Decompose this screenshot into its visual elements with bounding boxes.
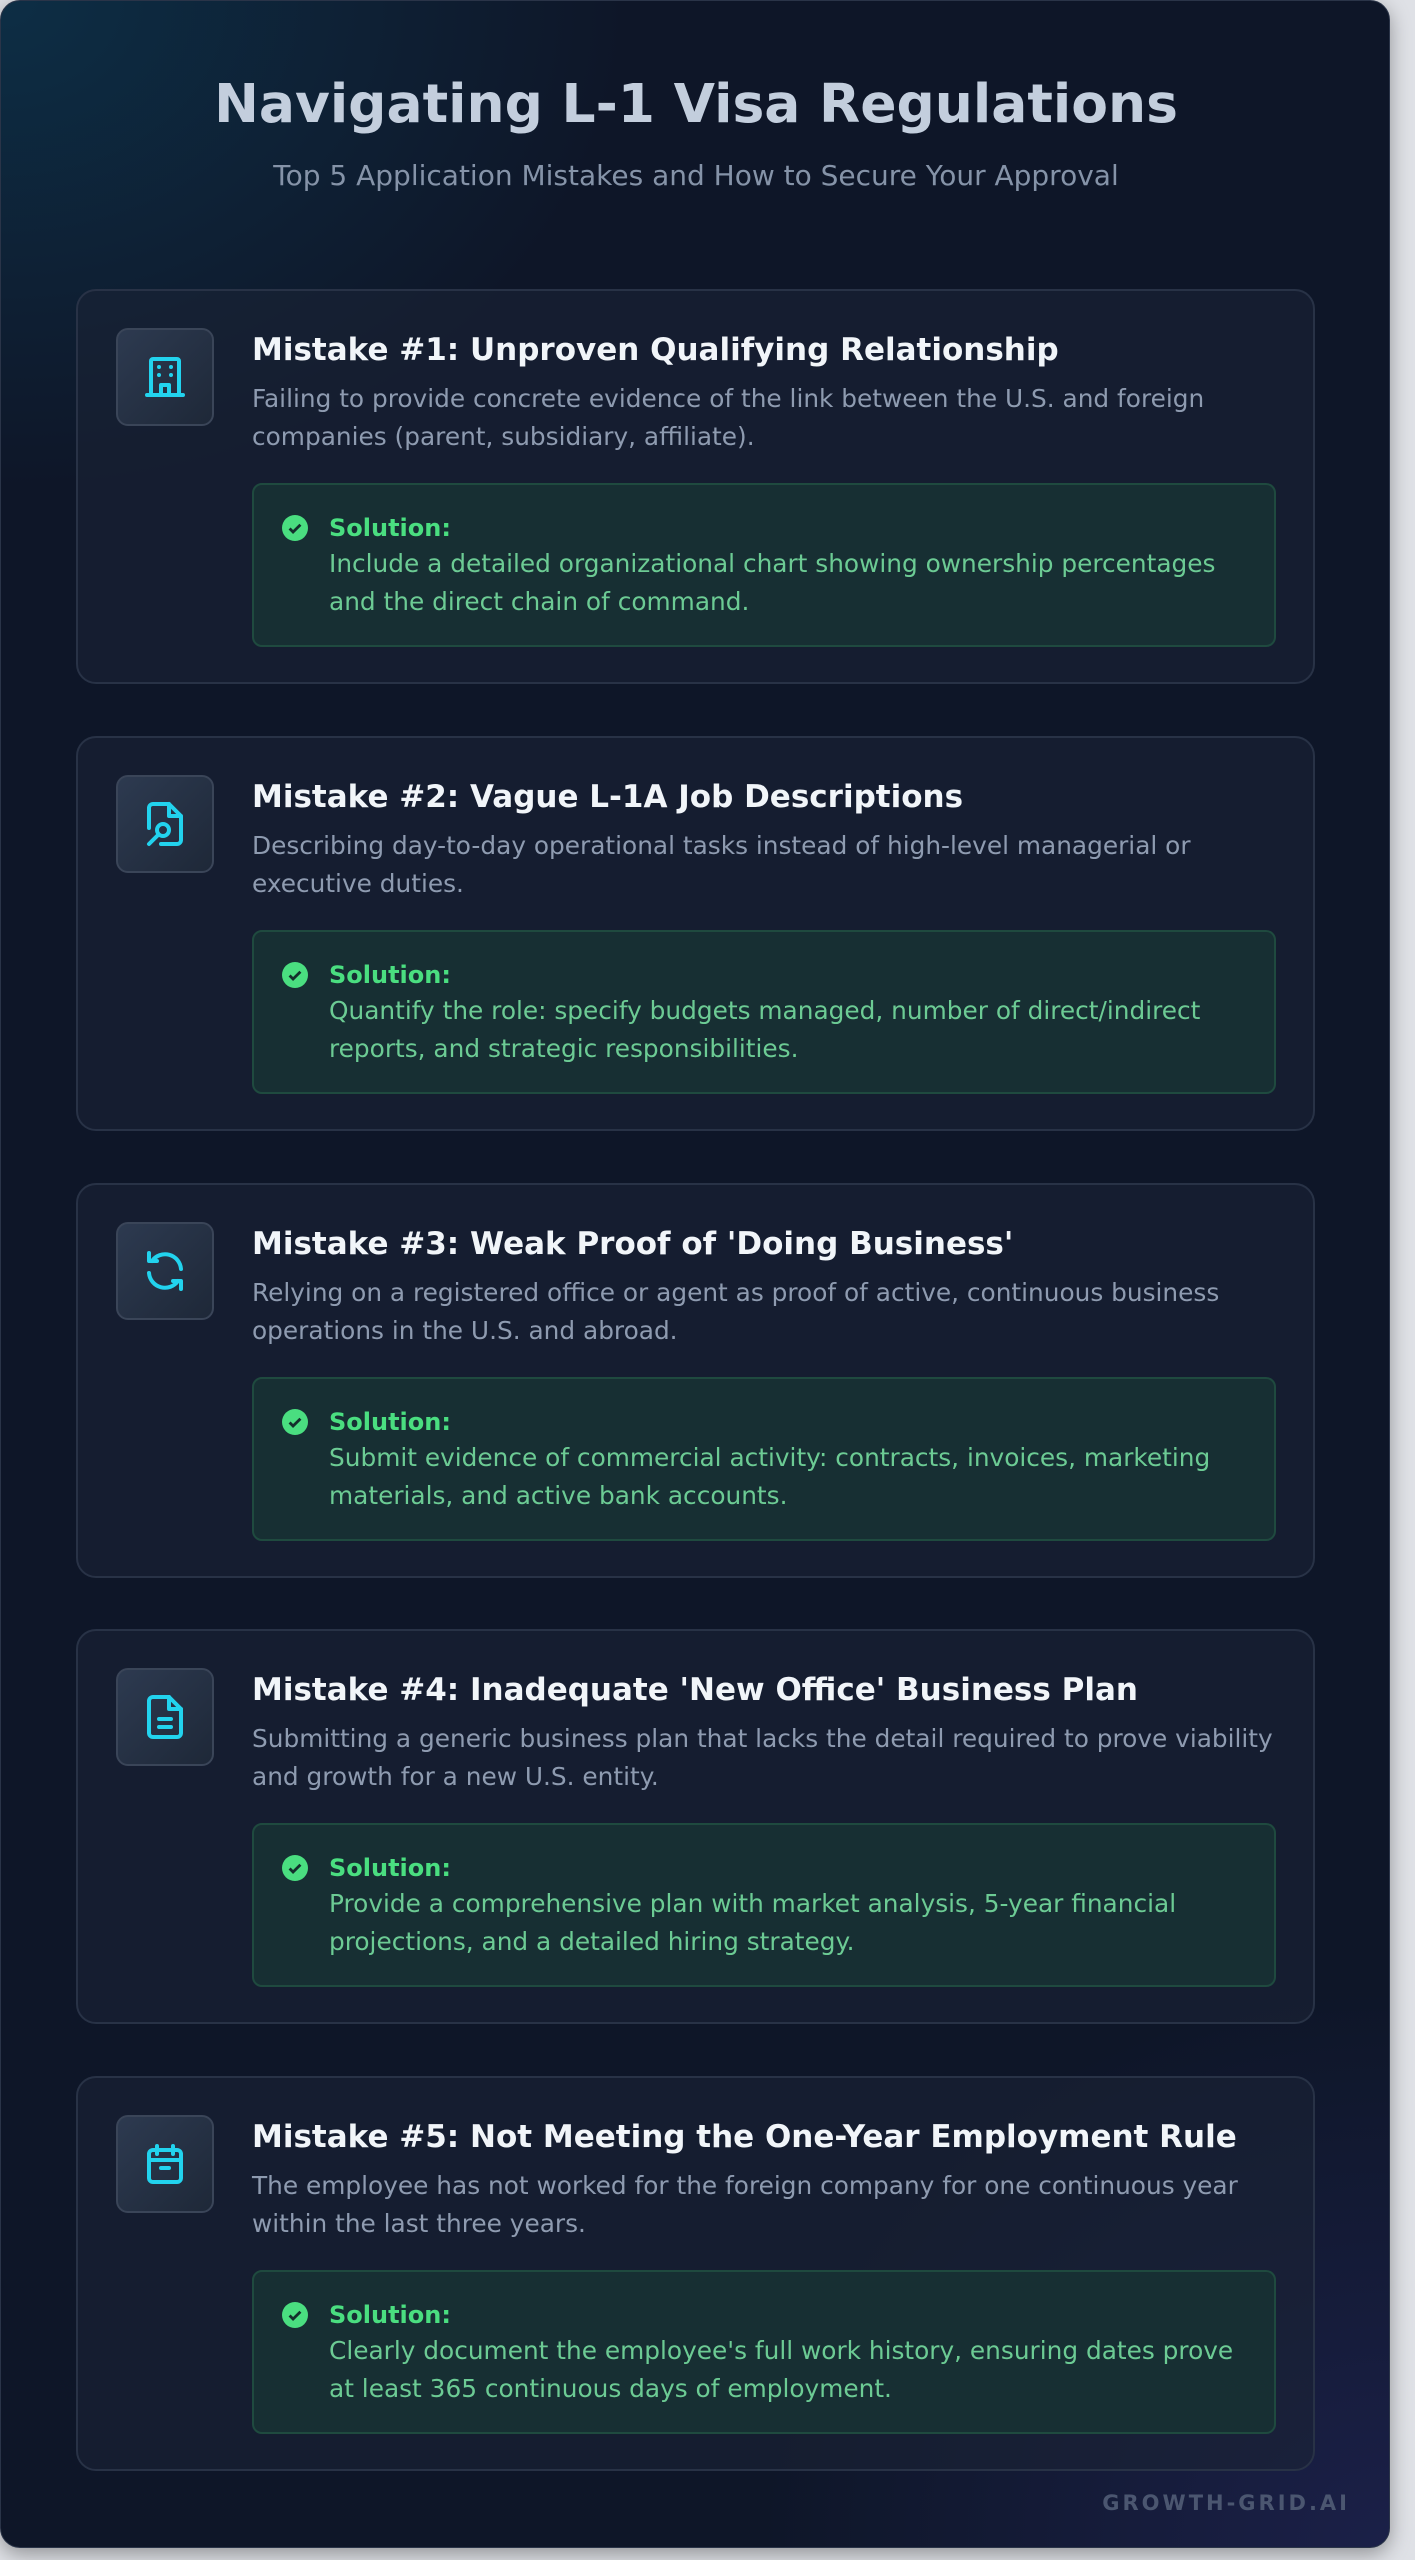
solution box: Solution: bbox=[329, 2301, 451, 2329]
solution box: at least 365 continuous days of employment. bbox=[329, 2374, 892, 2403]
description: within the last three years. bbox=[252, 2209, 586, 2238]
solution box: Solution: bbox=[329, 1854, 451, 1882]
description: Relying on a registered office or agent as proof of active, continuous business bbox=[252, 1278, 1219, 1307]
solution box: materials, and active bank accounts. bbox=[329, 1481, 787, 1510]
solution box: and the direct chain of command. bbox=[329, 587, 749, 616]
icon: refresh bbox=[116, 1222, 214, 1320]
icon: document search bbox=[116, 775, 214, 873]
description bbox=[252, 2171, 1238, 2238]
description: Describing day-to-day operational tasks instead of high-level managerial or bbox=[252, 831, 1191, 860]
solution box bbox=[252, 483, 1276, 647]
solution box: Include a detailed organizational chart showing ownership percentages bbox=[329, 549, 1215, 578]
heading: Mistake #2: Vague L-1A Job Descriptions bbox=[252, 779, 963, 815]
description: operations in the U.S. and abroad. bbox=[252, 1316, 678, 1345]
panel: mistake 4 bbox=[76, 1629, 1315, 2024]
icon: building bbox=[116, 328, 214, 426]
title: Navigating L-1 Visa Regulations bbox=[214, 72, 1178, 135]
panel: mistake 2 bbox=[76, 736, 1315, 1131]
solution box: Quantify the role: specify budgets managed, number of direct/indirect bbox=[329, 996, 1200, 1025]
icon: document bbox=[116, 1668, 214, 1766]
description bbox=[252, 831, 1191, 898]
description: Submitting a generic business plan that lacks the detail required to prove viability bbox=[252, 1724, 1273, 1753]
solution box: Submit evidence of commercial activity: contracts, invoices, marketing bbox=[329, 1443, 1210, 1472]
subtitle: Top 5 Application Mistakes and How to Secure Your Approval bbox=[273, 159, 1119, 192]
solution box bbox=[252, 1823, 1276, 1987]
panel: mistake 5 bbox=[76, 2076, 1315, 2471]
icon: calendar bbox=[116, 2115, 214, 2213]
description bbox=[252, 1724, 1273, 1791]
solution box bbox=[252, 2270, 1276, 2434]
heading: Mistake #3: Weak Proof of 'Doing Business' bbox=[252, 1226, 1013, 1262]
solution box bbox=[252, 1377, 1276, 1541]
description bbox=[252, 384, 1204, 451]
description: The employee has not worked for the foreign company for one continuous year bbox=[252, 2171, 1238, 2200]
heading: Mistake #4: Inadequate 'New Office' Business Plan bbox=[252, 1672, 1138, 1708]
panel: mistake 1 bbox=[76, 289, 1315, 684]
heading: Mistake #1: Unproven Qualifying Relationship bbox=[252, 332, 1059, 368]
solution box: Solution: bbox=[329, 961, 451, 989]
description bbox=[252, 1278, 1219, 1345]
solution box: Provide a comprehensive plan with market analysis, 5-year financial bbox=[329, 1889, 1176, 1918]
description: executive duties. bbox=[252, 869, 464, 898]
solution box bbox=[252, 930, 1276, 1094]
description: and growth for a new U.S. entity. bbox=[252, 1762, 659, 1791]
solution box: Clearly document the employee's full work history, ensuring dates prove bbox=[329, 2336, 1233, 2365]
description: Failing to provide concrete evidence of the link between the U.S. and foreign bbox=[252, 384, 1204, 413]
solution box: Solution: bbox=[329, 514, 451, 542]
solution box: projections, and a detailed hiring strategy. bbox=[329, 1927, 855, 1956]
footer brand: GROWTH-GRID.AI bbox=[1102, 2491, 1350, 2515]
heading: Mistake #5: Not Meeting the One-Year Employment Rule bbox=[252, 2119, 1237, 2155]
solution box: Solution: bbox=[329, 1408, 451, 1436]
panel: mistake 3 bbox=[76, 1183, 1315, 1578]
solution box: reports, and strategic responsibilities. bbox=[329, 1034, 798, 1063]
description: companies (parent, subsidiary, affiliate). bbox=[252, 422, 755, 451]
